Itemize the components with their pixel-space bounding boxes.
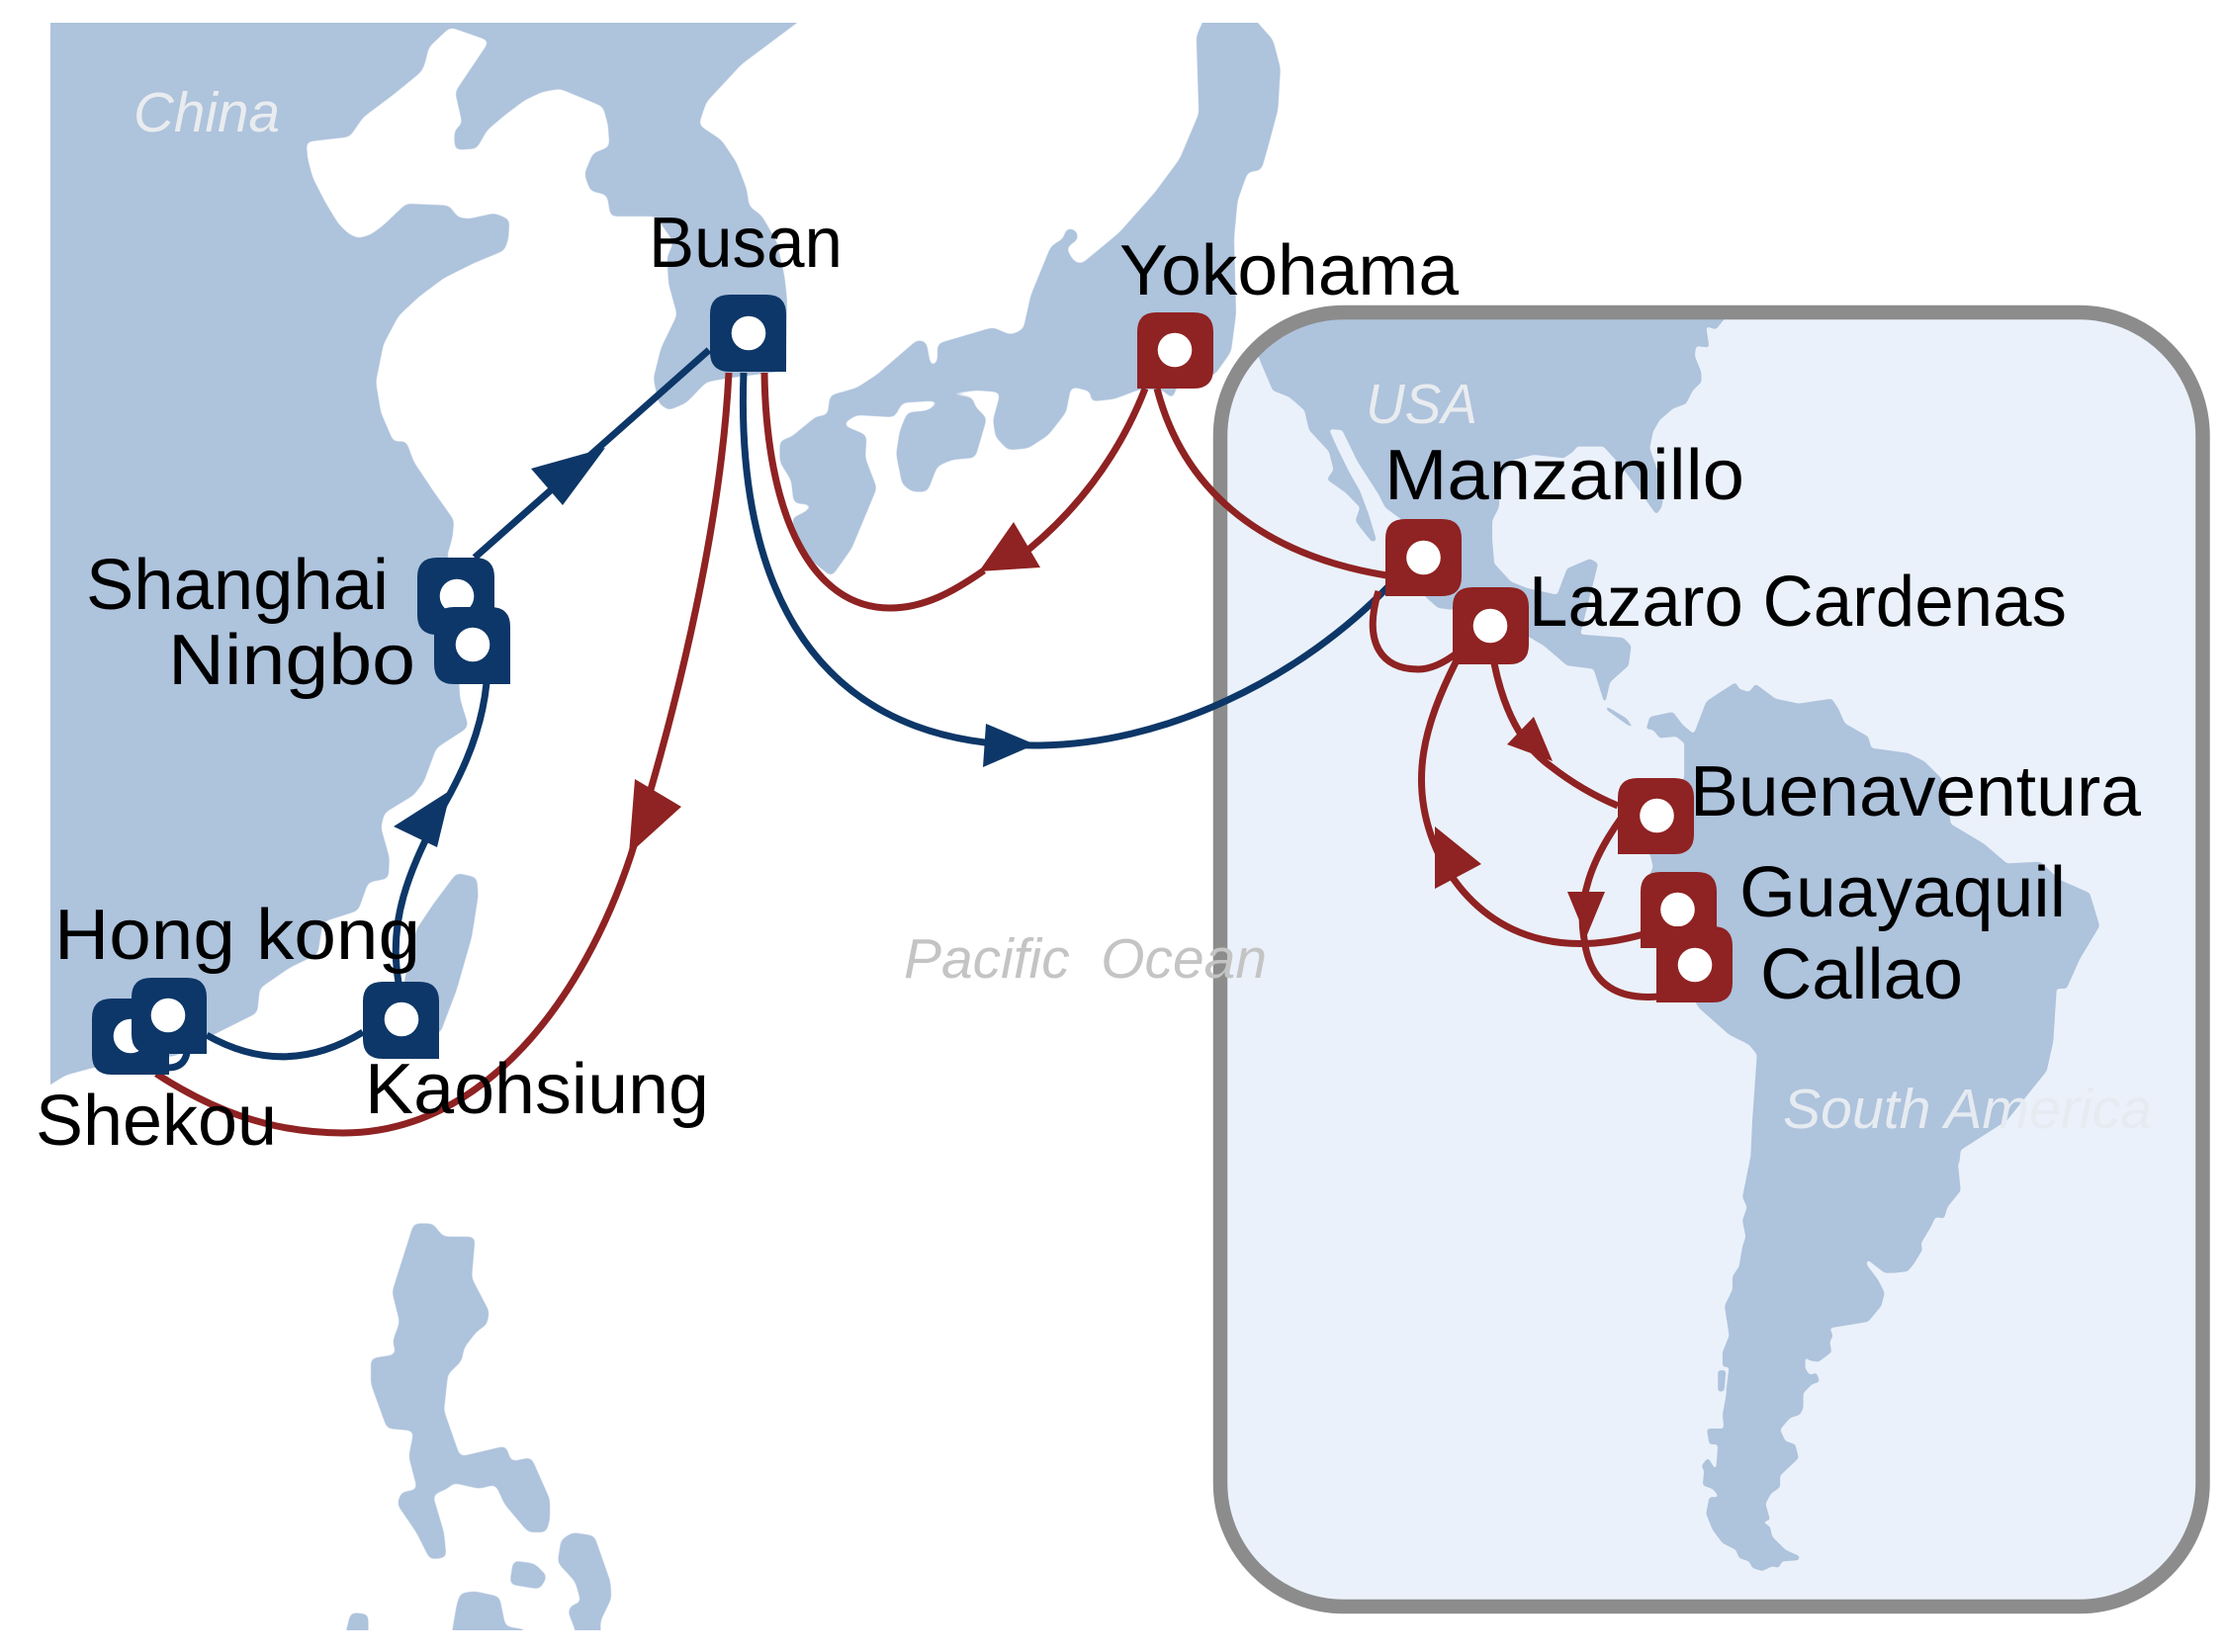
port label: Hong kong: Hong kong (54, 896, 420, 975)
marker: Buenaventura (1618, 778, 1694, 854)
marker: Busan (710, 295, 786, 372)
route: Shanghai to Busan (475, 350, 709, 558)
route: Yokohama to Manzanillo (1157, 389, 1386, 575)
port label: Lazaro Cardenas: Lazaro Cardenas (1529, 563, 2067, 642)
land: Americas (1240, 297, 2099, 1571)
port markers (92, 295, 1733, 1075)
land: Japan (779, 0, 1281, 577)
marker: Shekou (92, 999, 169, 1075)
port label: Busan: Busan (649, 204, 843, 283)
land: Taiwan (403, 873, 479, 1037)
marker: Hong Kong (132, 978, 207, 1054)
port labels (36, 204, 2142, 1161)
shipping routes (156, 350, 1658, 1133)
marker: Shanghai (417, 558, 494, 635)
land: North and Central America (1258, 319, 1725, 745)
port label: Callao: Callao (1760, 935, 1963, 1014)
port label: Guayaquil: Guayaquil (1739, 853, 2066, 932)
marker: Callao (1656, 926, 1733, 1002)
route: Guayaquil to Lazaro Cardenas (1421, 662, 1644, 943)
route: Hong Kong to Shekou (168, 1053, 187, 1068)
land: Philippines (338, 1223, 611, 1652)
route: Manzanillo to Lazaro Cardenas (1373, 591, 1458, 669)
port label: Buenaventura: Buenaventura (1690, 752, 2142, 831)
region labels (133, 81, 2152, 1141)
route: Yokohama to Busan (764, 373, 1145, 608)
port label: Ningbo: Ningbo (168, 621, 415, 700)
marker: Ningbo (434, 607, 510, 684)
port label: Yokohama: Yokohama (1119, 231, 1460, 310)
route: Lazaro Cardenas to Buenaventura (1494, 663, 1618, 806)
land: East Asia (0, 0, 1281, 1652)
land: China and Korea (50, 23, 797, 1086)
marker: Kaohsiung (363, 982, 439, 1059)
region label: USA: USA (1366, 373, 1477, 436)
port label: Kaohsiung: Kaohsiung (365, 1050, 709, 1129)
marker: Lazaro Cardenas (1453, 587, 1529, 664)
marker: Guayaquil (1641, 872, 1717, 948)
region label: China: China (133, 81, 280, 144)
route: Busan to Shekou (156, 373, 729, 1133)
port label: Shanghai: Shanghai (86, 546, 389, 625)
route: Hong Kong to Kaohsiung (207, 1032, 363, 1057)
panel: Americas background (1220, 312, 2203, 1607)
port label: Shekou: Shekou (36, 1082, 277, 1161)
land: South America north (1637, 682, 2099, 1164)
region label: Pacific Ocean: Pacific Ocean (904, 927, 1267, 991)
route: Busan to Manzanillo (743, 373, 1393, 767)
port label: Manzanillo: Manzanillo (1384, 436, 1744, 515)
marker: Manzanillo (1385, 519, 1462, 596)
route: Buenaventura to Callao (1567, 819, 1658, 997)
region label: South America: South America (1783, 1078, 2152, 1141)
panel: Americas border (1220, 312, 2203, 1607)
land: South America south (1701, 1158, 1961, 1571)
route: Ningbo to Kaohsiung (394, 683, 487, 983)
marker: Yokohama (1137, 312, 1213, 389)
